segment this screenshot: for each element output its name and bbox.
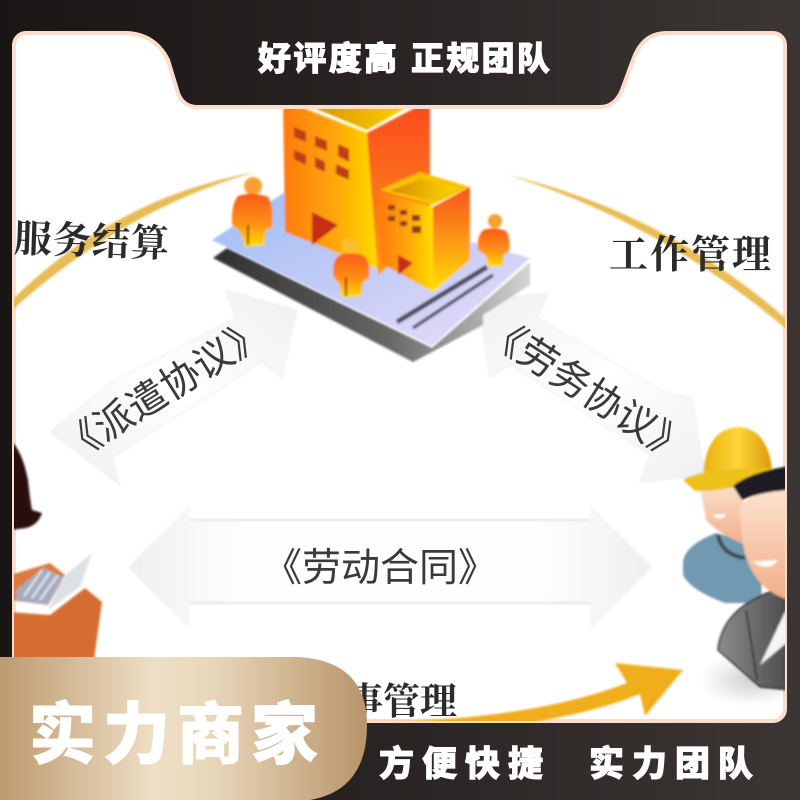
bottom slogans [379, 744, 761, 784]
person 1 [232, 177, 272, 247]
gold arc: right [508, 175, 790, 332]
gold arrow: bottom [340, 663, 683, 735]
badge text: 实力商家 [29, 698, 325, 773]
platform lines [397, 267, 487, 322]
diagram illustration [10, 100, 800, 735]
large building [283, 100, 430, 275]
blue shirt worker [683, 480, 762, 603]
top tab [126, 0, 665, 107]
label: work management: 工作管理 [609, 234, 773, 277]
suited man [718, 466, 790, 690]
title: 好评度高 正规团队 [258, 40, 550, 77]
arrow: labor contract [128, 505, 652, 630]
arrow: labor agreement [478, 293, 705, 482]
label: dispatch agreement: 《派遣协议》 [54, 310, 275, 471]
small building [380, 172, 470, 292]
bottom dark bar [0, 723, 800, 800]
workers [682, 425, 785, 702]
label: labor contract: 《劳动合同》 [263, 547, 497, 590]
person 2 [333, 238, 369, 298]
label: service settlement: 服务结算 [13, 218, 171, 266]
desk [10, 588, 102, 660]
platform underside [213, 248, 530, 362]
person 3 [478, 214, 510, 267]
arrow edges [190, 520, 590, 603]
label: labor agreement: 《劳务协议》 [477, 309, 697, 472]
gold arc: left [10, 172, 256, 312]
hair [10, 440, 42, 530]
label: HR management: 人事管理 [309, 681, 457, 723]
arrow: dispatch agreement [50, 290, 297, 485]
worker shadow [710, 662, 782, 702]
woman at laptop [10, 440, 102, 660]
hard hat [683, 427, 772, 491]
platform [212, 192, 530, 346]
second platform line [413, 275, 493, 328]
company building cluster [212, 100, 530, 362]
gold badge [0, 657, 367, 800]
arm [10, 563, 65, 605]
laptop keyboard [16, 568, 63, 605]
slogan: convenient: 方便快捷 [379, 744, 551, 784]
laptop screen [48, 553, 92, 610]
slogan: strong team: 实力团队 [589, 744, 761, 784]
